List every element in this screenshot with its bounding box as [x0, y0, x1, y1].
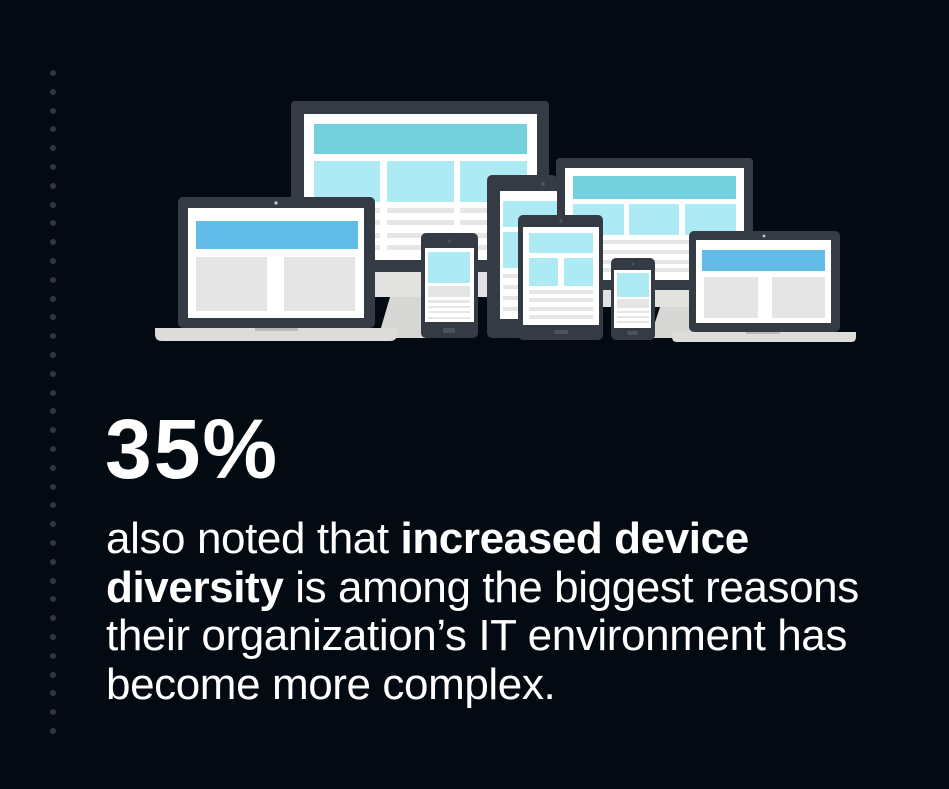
icon: desktop monitor [291, 101, 549, 338]
illustration: devices [155, 101, 856, 342]
statistic: 35%: 35% [105, 402, 279, 496]
icon: left laptop [155, 197, 397, 341]
decorative dotted line [50, 70, 56, 734]
icon: small phone right [611, 258, 655, 340]
icon: small phone left [421, 233, 478, 338]
icon: tall tablet [487, 175, 557, 338]
text block: description: become more complex. [106, 660, 555, 708]
icon: mid tablet [518, 215, 603, 340]
icon: second monitor [556, 158, 753, 338]
text block: description: also noted that increased device [106, 514, 749, 563]
icon: right laptop [672, 231, 856, 342]
text block: description: diversity is among the biggest reasons [106, 562, 859, 612]
text block: description [106, 514, 859, 708]
text block: description: their organization’s IT environment has [106, 611, 847, 660]
